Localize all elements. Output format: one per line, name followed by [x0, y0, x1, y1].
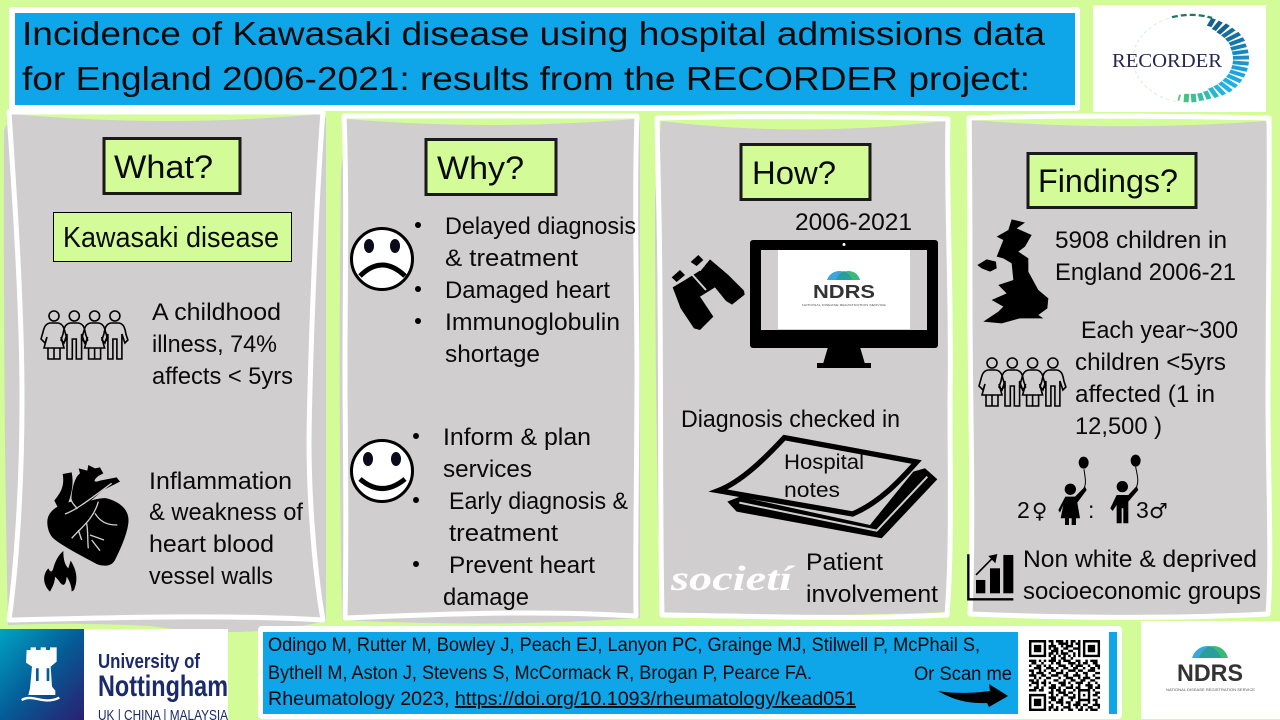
heading: How?: [741, 144, 870, 200]
icon: children group: [979, 358, 1066, 406]
icon: happy face: [352, 440, 412, 502]
list: benefits: damage: [443, 584, 529, 611]
text: non white groups: Non white & deprived: [1023, 546, 1257, 573]
text: inflammation: Inflammation: [149, 468, 292, 495]
sex ratio: ♀: [1032, 499, 1047, 523]
icon: sad face: [352, 228, 412, 290]
text: or scan me: Or Scan me: [914, 664, 1012, 685]
text: each year: [1075, 317, 1238, 440]
sex ratio: [1017, 455, 1168, 525]
arrow: [938, 684, 1008, 707]
icon: hospital notes: [718, 438, 937, 538]
list: benefits: Inform & plan: [443, 424, 591, 451]
icon: UK map: [977, 219, 1048, 323]
sex ratio: ♂: [1149, 499, 1168, 523]
icon: rising bar chart: [968, 554, 1013, 599]
heading: Findings?: Findings?: [1038, 163, 1178, 199]
icon: binoculars: [672, 255, 745, 330]
text: non white groups: socioeconomic groups: [1023, 578, 1261, 605]
icon: inflamed heart: [44, 465, 129, 592]
label: Kawasaki disease: [54, 212, 292, 262]
heading: How?: How?: [752, 155, 836, 191]
text: inflammation: & weakness of: [149, 499, 303, 526]
list: problems: shortage: [445, 341, 540, 368]
text: patient involvement: [806, 549, 938, 608]
heading: Why?: Why?: [437, 150, 524, 186]
heading: What?: What?: [114, 149, 213, 185]
panel: What?: [4, 112, 326, 632]
icon: hospital notes: notes: [784, 478, 840, 502]
text: childhood illness: illness, 74%: [152, 331, 277, 358]
heading: Findings?: [1028, 154, 1196, 208]
logo: societi: societí: [670, 559, 796, 598]
text: childhood illness: A childhood: [152, 299, 281, 326]
icon: hospital notes: Hospital: [784, 450, 864, 474]
logo: University of Nottingham: University of: [98, 651, 200, 673]
icon: monitor with NDRS logo: NDRS: [813, 281, 875, 302]
title banner: Incidence of Kawasaki disease using hospital admissions data: [22, 16, 1045, 53]
list: problems: Immunoglobulin: [445, 309, 620, 336]
logo: NDRS: NATIONAL DISEASE REGISTRATION SERVICE: [1166, 688, 1256, 692]
citation banner: [258, 626, 1122, 719]
panel: Why?: [340, 116, 640, 624]
list: benefits: Early diagnosis &: [449, 488, 628, 515]
panel: Findings?: [968, 116, 1270, 617]
panel: How?: [655, 117, 950, 617]
text: each year: affected (1 in: [1075, 381, 1215, 408]
sex ratio: 3: [1136, 497, 1149, 523]
RECORDER logo: RECORDER: [1112, 50, 1223, 72]
text: each year: 12,500 ): [1075, 413, 1162, 440]
icon: boy with balloon: [1110, 455, 1141, 523]
text: each year: Each year~300: [1081, 317, 1238, 344]
text: reference: Odingo M, Rutter M, Bowley J, Peach EJ, Lanyon PC, Grainge MJ, Stilwell P, McPhail S,: [268, 635, 980, 656]
text: each year: children <5yrs: [1075, 349, 1226, 376]
list: problems: Delayed diagnosis: [445, 213, 636, 240]
logo: University of Nottingham: Nottingham: [98, 670, 228, 703]
list: problems: & treatment: [445, 245, 578, 272]
sex ratio: 2: [1017, 497, 1030, 523]
heading: What?: [104, 138, 240, 194]
RECORDER logo: [1093, 5, 1266, 112]
text: 5908 children: 5908 children in: [1055, 227, 1227, 254]
logo: University of Nottingham: [0, 629, 228, 720]
list: problems: [415, 213, 636, 368]
logo: NDRS: NDRS: [1177, 660, 1243, 687]
list: benefits: Prevent heart: [449, 552, 595, 579]
text: inflammation: vessel walls: [149, 563, 273, 590]
logo: NDRS: [1141, 621, 1280, 719]
sex ratio: :: [1088, 497, 1094, 523]
list: benefits: services: [443, 456, 532, 483]
text: diagnosis checked: Diagnosis checked in: [681, 406, 900, 433]
text: childhood illness: affects < 5yrs: [152, 363, 293, 390]
text: reference: Rheumatology 2023, https://doi.org/10.1093/rheumatology/kead051: [268, 689, 856, 710]
list: benefits: [413, 424, 628, 611]
list: problems: Damaged heart: [445, 277, 610, 304]
title banner: [9, 7, 1080, 111]
title banner: for England 2006-2021: results from the RECORDER project:: [22, 61, 1030, 98]
text: inflammation: [149, 468, 303, 590]
text: childhood illness: [152, 299, 293, 390]
text: patient involvement: involvement: [806, 581, 938, 608]
text: 5908 children: England 2006-21: [1055, 259, 1236, 286]
list: benefits: treatment: [449, 520, 558, 547]
icon: children group: [41, 311, 128, 359]
text: years: 2006-2021: [795, 209, 912, 236]
text: non white groups: [1023, 546, 1261, 605]
icon: monitor with NDRS logo: NATIONAL DISEASE REGISTRATION SERVICE: [802, 303, 886, 307]
text: inflammation: heart blood: [149, 531, 274, 558]
label: Kawasaki disease: Kawasaki disease: [63, 222, 279, 254]
text: reference: Bythell M, Aston J, Stevens S, McCormack R, Brogan P, Pearce FA.: [268, 663, 812, 684]
QR code: [1029, 641, 1100, 710]
icon: girl with balloon: [1058, 457, 1089, 525]
text: 5908 children: [1055, 227, 1236, 286]
icon: monitor with NDRS logo: [750, 240, 938, 368]
heading: Why?: [426, 140, 556, 194]
text: reference: [268, 635, 980, 710]
text: patient involvement: Patient: [806, 549, 883, 576]
